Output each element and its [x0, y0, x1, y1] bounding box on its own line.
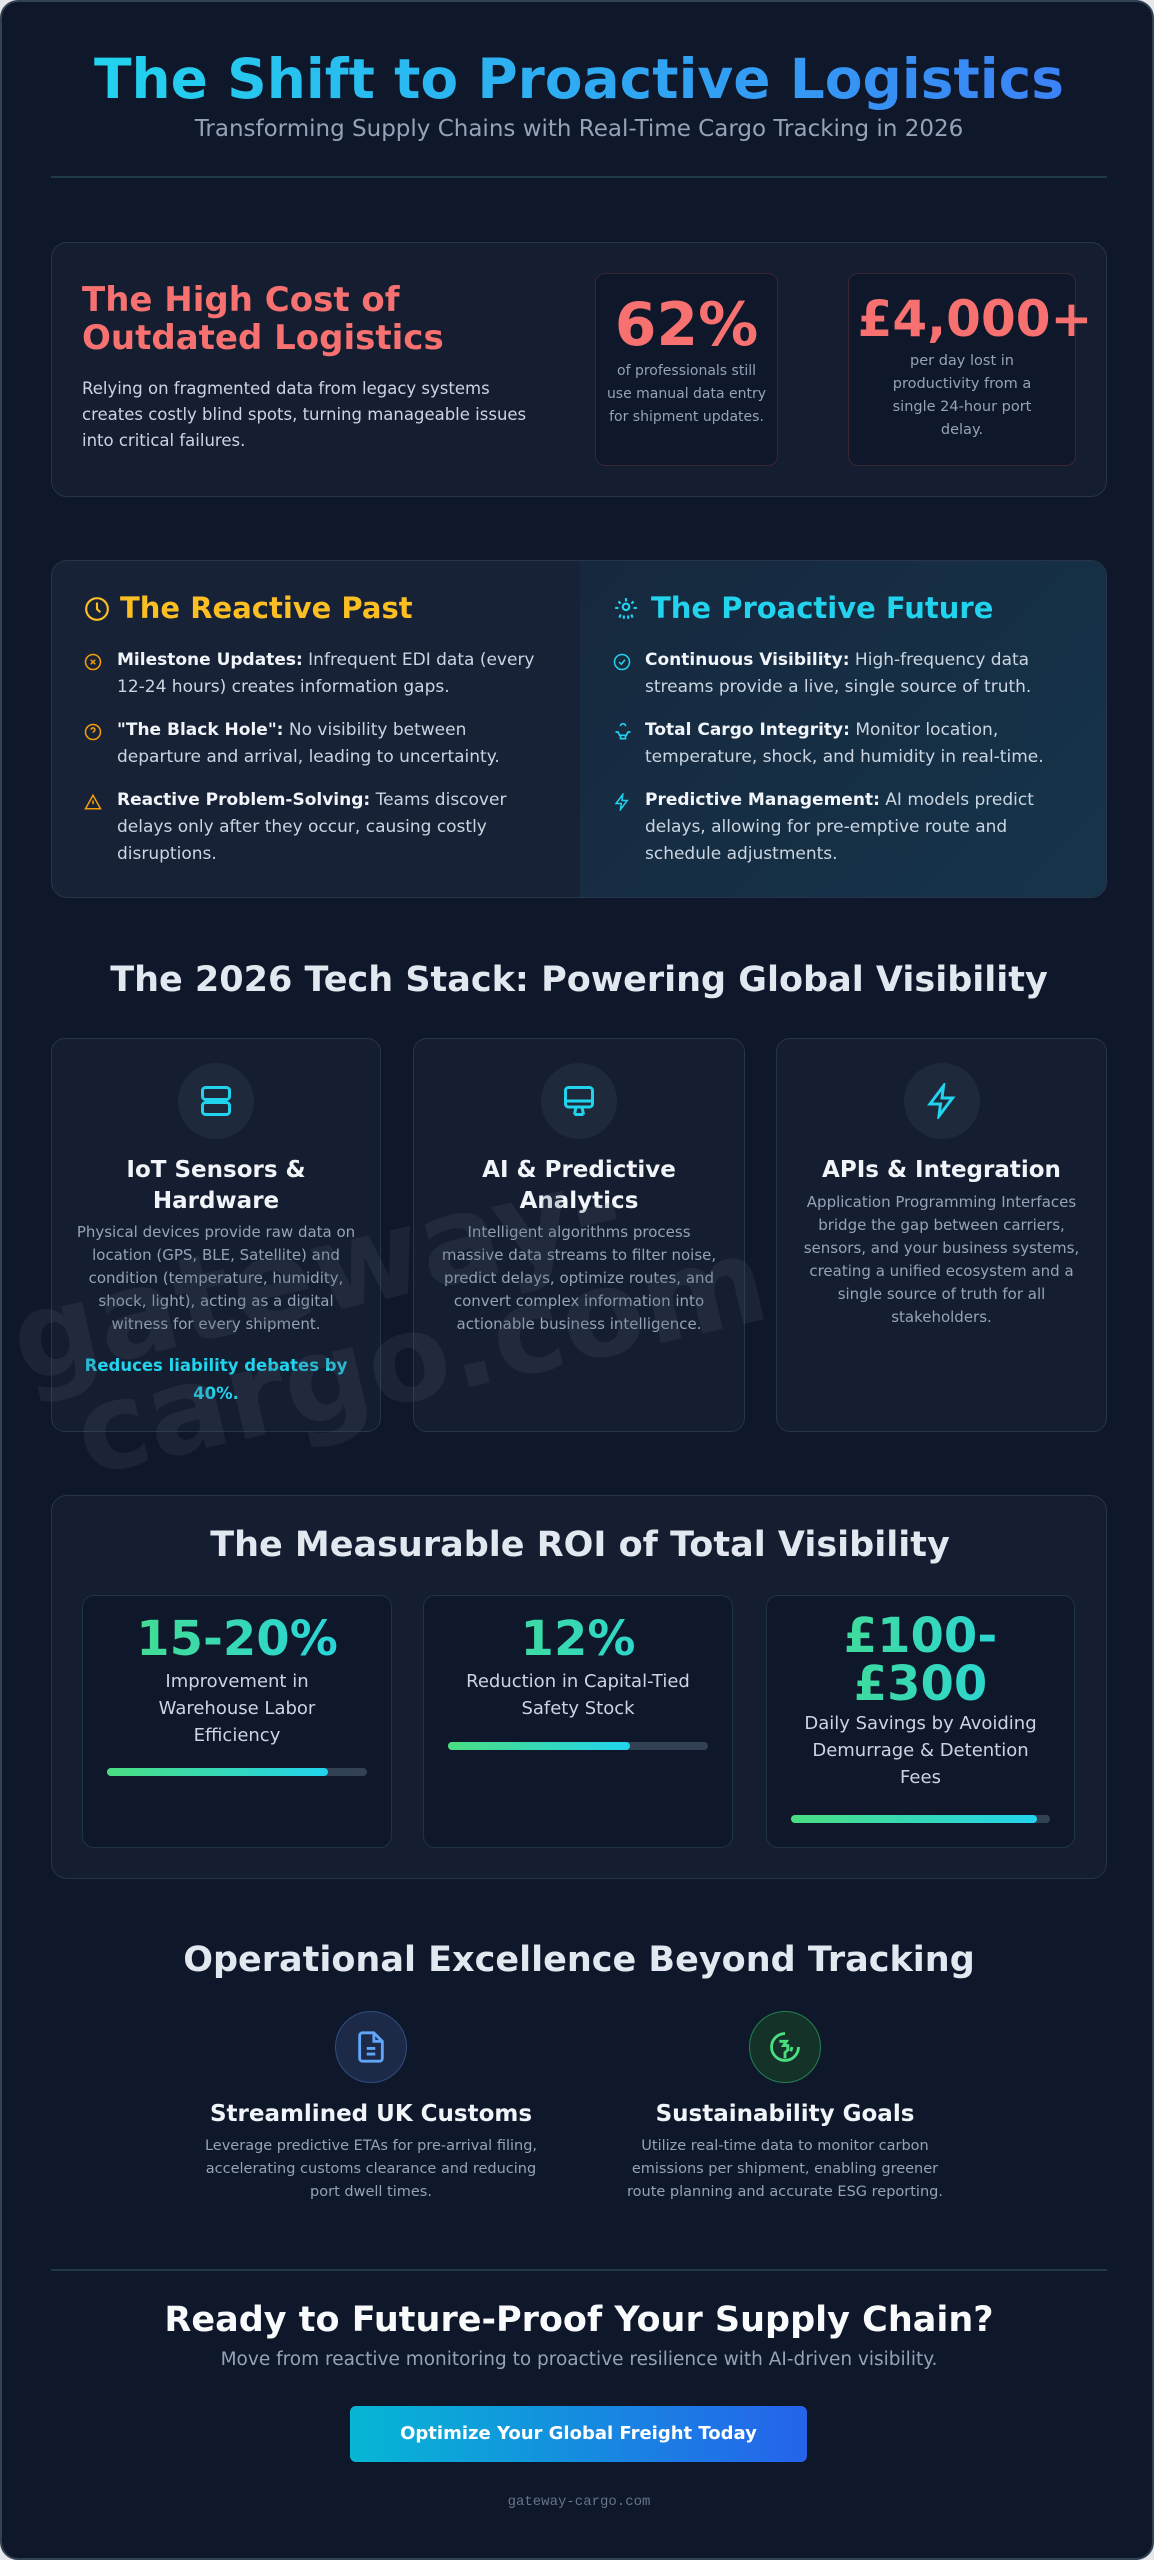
title: IoT Sensors & [126, 1157, 306, 1183]
block: customs: Leverage predictive ETAs for pre-arrival filing, accelerating customs clearance and reducing port dwell times. [205, 2138, 537, 2200]
stat: 62%: 62% [615, 290, 758, 360]
title: The Shift to Proactive Logistics [94, 47, 1064, 111]
block: customs: Streamlined UK Customs [210, 2101, 532, 2127]
item: continuous visibility: Continuous Visibility: High-frequency data streams provide a live, single source of truth. [645, 650, 1031, 697]
item: predictive management: Predictive Management: AI models predict delays, allowing for pre-emptive route and schedule adjustments. [645, 790, 1034, 864]
heading: ROI: The Measurable ROI of Total Visibility [210, 1525, 950, 1565]
title: APIs & Integration [822, 1157, 1061, 1183]
stat: £100-£300: Demurrage & Detention [812, 1740, 1029, 1761]
heading: high cost: Outdated Logistics [82, 318, 444, 358]
stat: £100-£300: £300 [854, 1656, 987, 1712]
icon: document [335, 2011, 407, 2083]
text: CTA subtitle: Move from reactive monitoring to proactive resilience with AI-driven visibility. [221, 2349, 937, 2370]
icon: monitor [541, 1063, 617, 1139]
stat: 62% [595, 273, 778, 466]
watermark: gateway- [0, 1136, 635, 1411]
stat: 15-20%: Warehouse Labor [159, 1698, 315, 1719]
text: Physical devices provide raw data on location (GPS, BLE, Satellite) and condition (temperature, humidity, shock, light), acting as a digital witness for every shipment. [77, 1223, 355, 1333]
icon: sensor [615, 598, 637, 619]
title [482, 1157, 676, 1214]
stat: £100-£300: Fees [900, 1767, 941, 1788]
stat: 15-20%: Improvement in [165, 1671, 309, 1692]
block: customs [205, 2011, 537, 2200]
stat: £4,000+ [848, 273, 1076, 466]
item: milestone: Milestone Updates: Infrequent EDI data (every 12-24 hours) creates information gaps. [117, 650, 534, 697]
heading: proactive future: The Proactive Future [651, 591, 993, 625]
stat: 15-20% [82, 1595, 392, 1848]
heading: tech stack: The 2026 Tech Stack: Powering Global Visibility [110, 960, 1048, 1000]
highlight: Reduces liability debates by 40%. [85, 1356, 347, 1403]
stat: £100-£300: £100- [844, 1608, 997, 1664]
stat: 12% [423, 1595, 733, 1848]
text: high cost description: Relying on fragmented data from legacy systems creates costly blind spots, turning manageable issues into critical failures. [82, 379, 526, 450]
icon: bolt [904, 1063, 980, 1139]
button: CTA: Optimize Your Global Freight Today [400, 2423, 757, 2444]
stat: 12%: Reduction in Capital-Tied [466, 1671, 690, 1692]
stat: 15-20%: Efficiency [194, 1725, 280, 1746]
title: Hardware [153, 1188, 279, 1214]
heading: high cost [82, 280, 444, 358]
icon: clock [85, 597, 109, 621]
block: sustainability: Utilize real-time data to monitor carbon emissions per shipment, enabling greener route planning and accurate ESG reporting. [627, 2138, 943, 2200]
title [126, 1157, 306, 1214]
stat: £100-£300 [766, 1595, 1075, 1848]
block: sustainability: Sustainability Goals [656, 2101, 914, 2127]
stat: 62%: of professionals still use manual data entry for shipment updates. [607, 363, 766, 425]
item: cargo integrity: Total Cargo Integrity: Monitor location, temperature, shock, and humidity in real-time. [645, 720, 1044, 767]
item: black hole: "The Black Hole": No visibility between departure and arrival, leading to uncertainty. [117, 720, 500, 767]
text: Application Programming Interfaces bridge the gap between carriers, sensors, and your business systems, creating a unified ecosystem and a single source of truth for all stakeholders. [804, 1193, 1079, 1326]
panel: past vs future [51, 560, 1107, 898]
stat: £100-£300: Daily Savings by Avoiding [804, 1713, 1037, 1734]
stat: 12%: 12% [521, 1611, 635, 1667]
stat: 15-20%: 15-20% [136, 1611, 338, 1667]
heading: CTA: Ready to Future-Proof Your Supply Chain? [164, 2300, 994, 2340]
stat: 12%: Safety Stock [521, 1698, 635, 1719]
text: Intelligent algorithms process massive data streams to filter noise, predict delays, optimize routes, and convert complex information into actionable business intelligence. [442, 1223, 716, 1333]
heading: high cost: The High Cost of [82, 280, 400, 320]
stat: £4,000+: £4,000+ [858, 290, 1092, 348]
card: AI [413, 1038, 745, 1432]
panel: ROI [51, 1495, 1107, 1879]
watermark: cargo.com [62, 1210, 780, 1504]
card: IoT [51, 1038, 381, 1432]
block: sustainability [627, 2011, 943, 2200]
heading: reactive past: The Reactive Past [120, 591, 413, 625]
icon: server [178, 1063, 254, 1139]
title: AI & Predictive [482, 1157, 676, 1183]
footer: gateway-cargo.com [508, 2494, 650, 2510]
title: Analytics [520, 1188, 638, 1214]
button: CTA [350, 2406, 807, 2462]
item: reactive problem-solving: Reactive Problem-Solving: Teams discover delays only after they occur, causing costly disruptions. [117, 790, 506, 864]
stat: £4,000+: per day lost in productivity from a single 24-hour port delay. [893, 353, 1031, 438]
heading: operational excellence: Operational Excellence Beyond Tracking [183, 1940, 975, 1980]
icon: globe [749, 2011, 821, 2083]
subtitle: Transforming Supply Chains with Real-Time Cargo Tracking in 2026 [195, 116, 963, 142]
panel: high cost [51, 242, 1107, 497]
card: APIs [776, 1038, 1107, 1432]
